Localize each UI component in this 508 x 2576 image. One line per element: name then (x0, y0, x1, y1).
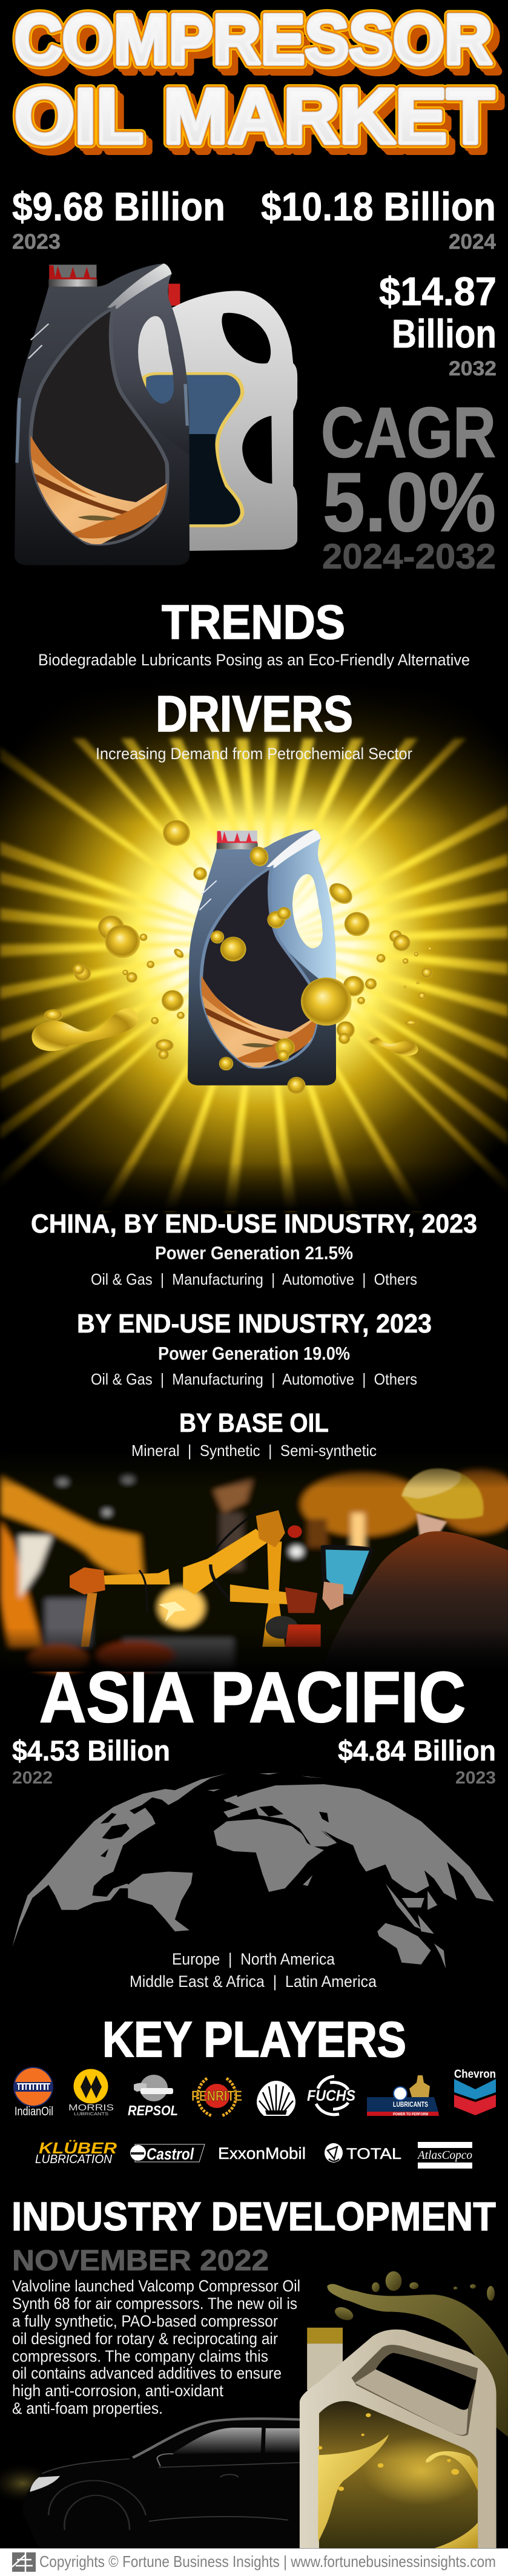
title line: OIL MARKET: OIL MARKET (15, 73, 494, 160)
Africa (214, 1819, 324, 1892)
paragraph: Valvoline development: a fully synthetic, PAO-based compressor (12, 2312, 278, 2330)
text block: by base oil: BY BASE OIL (179, 1408, 329, 1438)
car silhouette (0, 2419, 305, 2548)
left robot arm (70, 1567, 170, 1647)
logo: ExxonMobil: ExxonMobil (218, 2144, 306, 2163)
heading: Asia Pacific: ASIA PACIFIC (39, 1658, 466, 1738)
North America (12, 1773, 226, 1947)
heading: key players: KEY PLAYERS (102, 2011, 406, 2067)
worker with tablet (321, 1469, 508, 1672)
logo: Castrol: Castrol (147, 2145, 194, 2163)
logo: Kluber Lubrication: KLÜBER (39, 2139, 117, 2157)
logo: Morris Lubricants: LUBRICANTS (74, 2112, 108, 2116)
blurred factory background (0, 1452, 508, 1673)
text block: by base oil (131, 1408, 377, 1460)
Southeast Asia islands (386, 1883, 446, 1969)
stat: Asia Pacific 2022 (12, 1734, 170, 1788)
Australia (377, 1923, 431, 1965)
logo: Repsol: REPSOL (128, 2103, 178, 2118)
logo: IndianOil (14, 2067, 53, 2118)
text block: China by end-use industry (31, 1209, 477, 1288)
logo: Morris Lubricants (68, 2069, 114, 2116)
text block: by base oil: Mineral | Synthetic | Semi-synthetic (131, 1441, 377, 1460)
footer logo (12, 2552, 36, 2572)
front black bottle (15, 263, 190, 565)
logo: Total: TOTAL (346, 2146, 401, 2163)
beige oil jug (300, 2328, 496, 2548)
heading: trends: TRENDS (162, 595, 345, 649)
Eurasia (223, 1784, 494, 1902)
paragraph: Valvoline development: high anti-corrosion, anti-oxidant (12, 2382, 223, 2400)
image: factory robots and worker (0, 1452, 508, 1673)
stat: Asia Pacific 2022: $4.53 Billion (12, 1734, 170, 1767)
logo: Repsol (128, 2075, 178, 2118)
heading: drivers: DRIVERS (156, 685, 353, 742)
logo: HP Lubricants: POWER TO PERFORM (393, 2113, 428, 2116)
stat: 2032 market size: $14.87 (379, 269, 496, 314)
title line: OIL MARKET: OIL MARKET (15, 73, 494, 160)
paragraph: Valvoline development: oil designed for rotary & reciprocating air (12, 2330, 278, 2348)
logo: IndianOil: IndianOil (15, 2105, 53, 2118)
logo: HP Lubricants (367, 2075, 439, 2116)
logo: Kluber Lubrication (35, 2139, 117, 2166)
logo: Chevron: Chevron (454, 2068, 496, 2081)
illustration: car and oil jug (0, 2271, 508, 2548)
stat: Asia Pacific 2023: 2023 (455, 1768, 496, 1788)
title line: COMPRESSOR: COMPRESSOR (15, 0, 492, 79)
centre robot arm (159, 1504, 321, 1647)
heading: trends: Biodegradable Lubricants Posing as an Eco-Friendly Alternative (38, 651, 470, 669)
title line: OIL MARKET: OIL MARKET (22, 81, 501, 168)
text block: other regions: Europe | North America (172, 1950, 335, 1968)
Hudson Bay and arctic gaps (101, 1804, 147, 1857)
text block: global by end-use industry: Oil & Gas | Manufacturing | Automotive | Others (91, 1370, 417, 1388)
stat: CAGR (321, 393, 496, 576)
title line: OIL MARKET: OIL MARKET (15, 73, 494, 160)
text block: China by end-use industry: Power Generation 21.5% (155, 1242, 353, 1263)
stat: 2024 market size: 2024 (449, 230, 496, 254)
logo: Atlas Copco (417, 2142, 472, 2169)
text block: other regions: Middle East & Africa | Latin America (130, 1972, 377, 1991)
heading: trends (38, 595, 470, 669)
oil splash (327, 2271, 508, 2437)
paragraph: Valvoline development: compressors. The company claims this (12, 2347, 268, 2365)
logo: Fuchs (307, 2077, 355, 2115)
stat: 2032 market size (379, 269, 496, 380)
logo: HP Lubricants: LUBRICANTS (393, 2100, 428, 2109)
title line: COMPRESSOR: COMPRESSOR (15, 0, 492, 79)
text block: other regions (130, 1950, 377, 1991)
paragraph: Valvoline development (12, 2277, 300, 2417)
text block: China by end-use industry: CHINA, BY END-USE INDUSTRY, 2023 (31, 1209, 477, 1239)
logo: Penrite (191, 2078, 242, 2116)
subheading: November 2022: NOVEMBER 2022 (12, 2245, 269, 2277)
stat: 2024 market size (261, 184, 496, 254)
illustration: blue oil bottle (188, 829, 336, 1085)
stat: CAGR: 5.0% (323, 456, 496, 549)
stat: Asia Pacific 2023: $4.84 Billion (338, 1734, 496, 1767)
logo: Fuchs: FUCHS (307, 2087, 355, 2104)
stat: Asia Pacific 2022: 2022 (12, 1768, 53, 1788)
title (15, 0, 501, 168)
inland seas (240, 1806, 334, 1845)
stat: 2023 market size: 2023 (12, 230, 61, 254)
text block: global by end-use industry: BY END-USE INDUSTRY, 2023 (77, 1309, 432, 1339)
oil droplets (31, 820, 432, 1094)
logo: Chevron (454, 2068, 496, 2115)
text block: China by end-use industry: Oil & Gas | Manufacturing | Automotive | Others (91, 1270, 417, 1288)
logo: Atlas Copco: AtlasCopco (417, 2149, 472, 2162)
logo: Morris Lubricants: MORRIS (68, 2103, 114, 2113)
title line: COMPRESSOR: COMPRESSOR (15, 0, 492, 79)
stat: CAGR: 2024-2032 (322, 537, 496, 576)
logo: Penrite: PENRITE (191, 2088, 242, 2104)
title line: OIL MARKET: OIL MARKET (18, 77, 498, 164)
logo: Kluber Lubrication: LUBRICATION (35, 2153, 113, 2166)
stat: 2023 market size (12, 184, 225, 254)
illustration: oil bottles (15, 263, 297, 565)
logo: Shell (257, 2081, 295, 2116)
world map globe (12, 1773, 494, 1969)
logo: Total (325, 2143, 401, 2163)
paragraph: Valvoline development: Synth 68 for air compressors. The new oil is (12, 2294, 297, 2313)
text block: global by end-use industry (77, 1309, 432, 1388)
stat: 2023 market size: $9.68 Billion (12, 184, 225, 229)
footer bar (0, 2548, 508, 2576)
stat: 2032 market size: 2032 (449, 357, 496, 380)
paragraph: Valvoline development: & anti-foam properties. (12, 2399, 163, 2417)
glow: driver burst background (0, 684, 508, 1211)
paragraph: Valvoline development: oil contains advanced additives to ensure (12, 2364, 282, 2382)
heading: drivers (96, 685, 412, 763)
stat: Asia Pacific 2023 (338, 1734, 496, 1788)
South America (128, 1871, 193, 1931)
paragraph: Valvoline development: Valvoline launched Valcomp Compressor Oil (12, 2277, 300, 2295)
back white bottle (136, 284, 297, 551)
heading: drivers: Increasing Demand from Petrochemical Sector (96, 745, 412, 763)
text block: global by end-use industry: Power Generation 19.0% (158, 1343, 350, 1364)
title line: COMPRESSOR: COMPRESSOR (15, 0, 492, 79)
title line: OIL MARKET: OIL MARKET (15, 73, 494, 160)
